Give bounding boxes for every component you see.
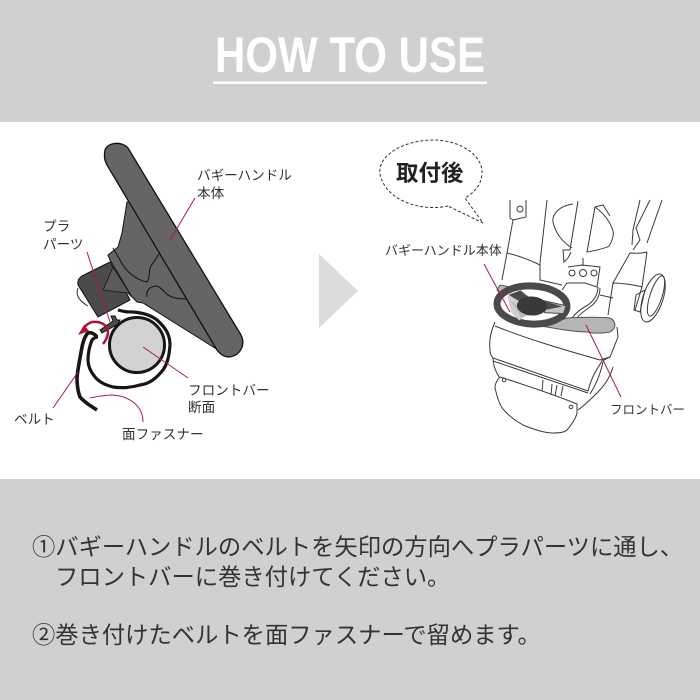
label: handle body: 本体 [197,186,225,201]
mount seam lines [113,248,187,299]
label: front bar section: 断面 [188,400,215,415]
right frame [600,200,662,315]
icon: plastic clip box [78,262,130,317]
icon: clip inner face [103,267,132,297]
text: step 1: フロントバーに巻き付けてください。 [55,564,450,590]
leader lines [53,198,195,422]
label: plastic part: パーツ [43,237,84,252]
arrow: next step [319,254,358,328]
harness buckle [562,258,600,290]
icon: stroller line art [490,200,670,433]
harness strap [572,287,600,319]
icon: clip arc [77,288,88,306]
diagram: cross-section of handle on front bar [14,143,292,442]
icon: handle mount [108,200,218,350]
icon: buggy handle ring [496,284,568,326]
icon: plastic part tip [100,316,120,333]
label: belt: ベルト [14,412,55,427]
diagram: stroller with handle attached [385,200,685,433]
label: plastic part: プラ [43,219,70,234]
icon: belt tail [77,333,97,410]
label: front bar: フロントバー [610,403,685,417]
bag body [490,322,618,391]
icon: belt wrap [88,310,170,388]
panel: diagram area [0,122,700,479]
icon: handle bar side view [104,143,243,357]
right shoulder pad [587,205,613,252]
text: step 1: ①バギーハンドルのベルトを矢印の方向へプラパーツに通し、 [32,534,683,560]
label: handle body: バギーハンドル本体 [385,243,502,258]
arrow: threading direction [78,322,108,344]
seat left side [502,200,562,285]
panel: instructions band [0,479,700,700]
callout: after attachment: 取付後 [396,161,464,186]
text: step 2: ②巻き付けたベルトを面ファスナーで留めます。 [32,622,541,648]
icon: front bar cross-section [110,318,164,372]
label: hook and loop: 面ファスナー [122,427,204,442]
label: handle body: バギーハンドル [197,168,292,183]
panel: header band [0,0,700,122]
wheel [636,271,670,325]
left shoulder pad [553,201,578,262]
leader lines [484,264,621,397]
title: HOW TO USE [215,27,485,83]
callout: after attachment [380,140,483,223]
icon: front bar [540,317,615,333]
footrest [495,377,577,433]
label: front bar section: フロントバー [188,383,270,398]
